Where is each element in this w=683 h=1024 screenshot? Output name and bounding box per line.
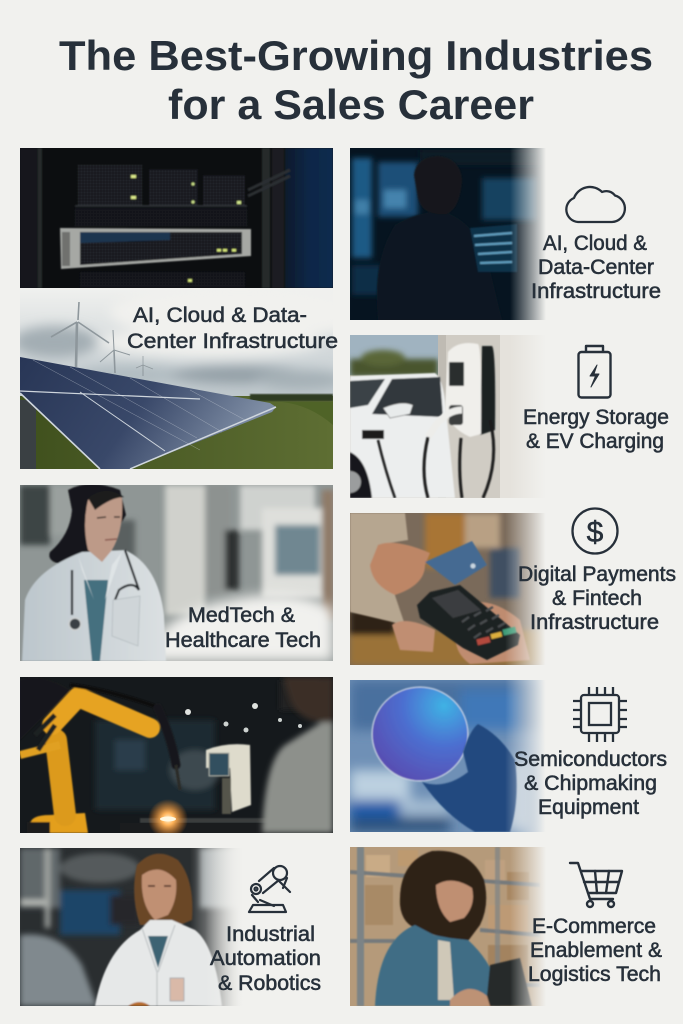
figure: instrument [206,744,251,814]
title: The Best-Growing Industries [59,32,653,79]
label: MedTech & Healthcare Tech: MedTech & [188,604,295,627]
panel: server rack photo [20,148,333,288]
label: Digital Payments & Fintech Infrastructure: & Fintech [552,587,642,610]
figure: person in foreground [20,934,97,1006]
panel: robot arm photo [20,677,333,839]
figure: woman in white coat [95,854,222,1006]
panel: card payment photo [350,513,550,665]
panel: warehouse worker photo [350,847,550,1006]
label: MedTech & Healthcare Tech: Healthcare Tech [165,629,321,652]
label: AI, Cloud & Data-Center left [127,304,338,353]
figure: woman with laptop [375,851,532,1006]
figure: yellow robot arm [20,678,180,833]
title [59,32,653,128]
label: Energy Storage & EV Charging: Energy Storage [523,406,669,429]
label: AI, Cloud & Data-Center right: Infrastructure [531,280,661,303]
figure: wafer [372,687,468,781]
label: Digital Payments & Fintech Infrastructure [518,563,676,634]
icon: wind turbines [51,302,153,376]
figure: doctor [22,484,166,661]
figure: white car [339,373,455,498]
label: Digital Payments & Fintech Infrastructure: Infrastructure [530,611,659,634]
label: E-Commerce Enablement & Logistics Tech: E-Commerce [532,915,656,938]
figure: wall charger [378,343,495,498]
icon: shopping cart [570,863,622,907]
figure: sleeve and hands [350,513,530,664]
panel: doctor photo [20,484,334,661]
figure: person from behind [262,677,333,833]
icon: microchip [573,687,627,742]
label: E-Commerce Enablement & Logistics Tech: Logistics Tech [528,963,661,986]
label: Semiconductors & Chipmaking Equipment [514,748,667,819]
label: Semiconductors & Chipmaking Equipment: & Chipmaking [524,772,657,795]
figure: hooded person [376,156,462,297]
label: MedTech & Healthcare Tech [165,604,321,652]
icon: cloud [566,187,625,222]
label: Industrial Automation & Robotics [210,923,321,995]
label: Digital Payments & Fintech Infrastructure: Digital Payments [518,563,676,586]
title: for a Sales Career [168,81,534,128]
label: Industrial Automation & Robotics: & Robotics [218,972,321,995]
label: AI, Cloud & Data-Center right [531,232,661,303]
label: AI, Cloud & Data-Center left: Center Infrastructure [127,330,338,353]
figure: monitor [470,224,517,272]
icon: robot arm [249,866,290,912]
figure: blue glove [422,724,517,832]
icon: dollar coin [572,508,618,554]
panel: solar and wind photo [20,301,333,469]
panel: EV charger photo [350,335,530,498]
label: Industrial Automation & Robotics: Automation [210,947,321,970]
label: E-Commerce Enablement & Logistics Tech [528,915,662,986]
label: Industrial Automation & Robotics: Industrial [226,923,315,946]
label: Energy Storage & EV Charging: & EV Charging [526,430,664,453]
figure: card terminal [417,585,520,660]
panel: engineer photo [20,848,236,1006]
label: Energy Storage & EV Charging [523,406,669,453]
label: AI, Cloud & Data-Center left: AI, Cloud & Data- [133,304,307,327]
label: Semiconductors & Chipmaking Equipment: Semiconductors [514,748,667,771]
label: E-Commerce Enablement & Logistics Tech: Enablement & [530,939,662,962]
icon: dollar coin: $ [587,516,604,549]
label: AI, Cloud & Data-Center right: Data-Center [538,256,654,279]
panel: analyst at monitors photo [350,148,550,320]
icon: battery [578,346,610,398]
label: Semiconductors & Chipmaking Equipment: Equipment [538,796,639,819]
panel: silicon wafer photo [350,680,550,832]
label: AI, Cloud & Data-Center right: AI, Cloud & [543,232,647,255]
